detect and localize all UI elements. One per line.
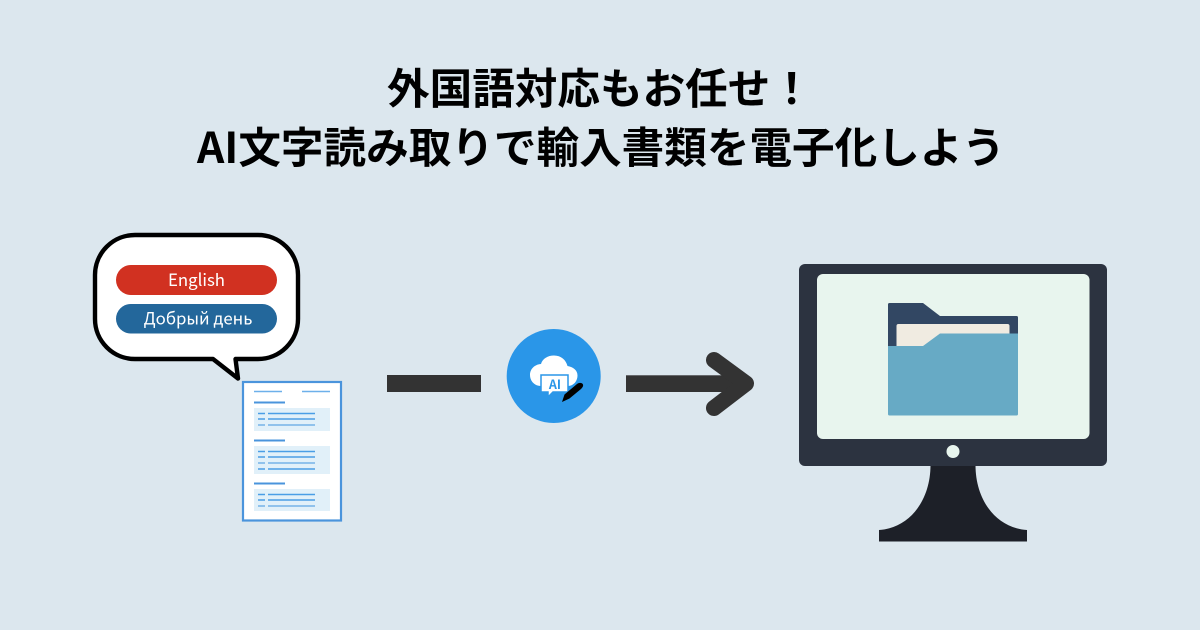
AI chat box: AI xyxy=(548,374,561,393)
monitor body xyxy=(799,264,1107,466)
screen xyxy=(817,274,1090,439)
title: 外国語対応もお任せ！ xyxy=(387,56,813,117)
speech bubble xyxy=(95,235,298,378)
power button xyxy=(946,445,960,458)
pen xyxy=(562,383,583,402)
pill: Russian: Добрый день xyxy=(144,306,252,330)
arrow xyxy=(626,360,746,408)
cloud xyxy=(530,356,578,386)
folder xyxy=(888,303,1018,416)
title: AI文字読み取りで輸入書類を電子化しよう xyxy=(196,115,1005,176)
monitor xyxy=(799,264,1107,542)
AI icon xyxy=(507,329,601,423)
pill: English xyxy=(116,265,277,295)
pill: English: English xyxy=(168,267,225,291)
stand xyxy=(879,465,1027,542)
pill: Russian xyxy=(116,304,277,334)
connector bar xyxy=(387,375,481,392)
document icon xyxy=(243,382,341,520)
title xyxy=(196,56,1005,176)
